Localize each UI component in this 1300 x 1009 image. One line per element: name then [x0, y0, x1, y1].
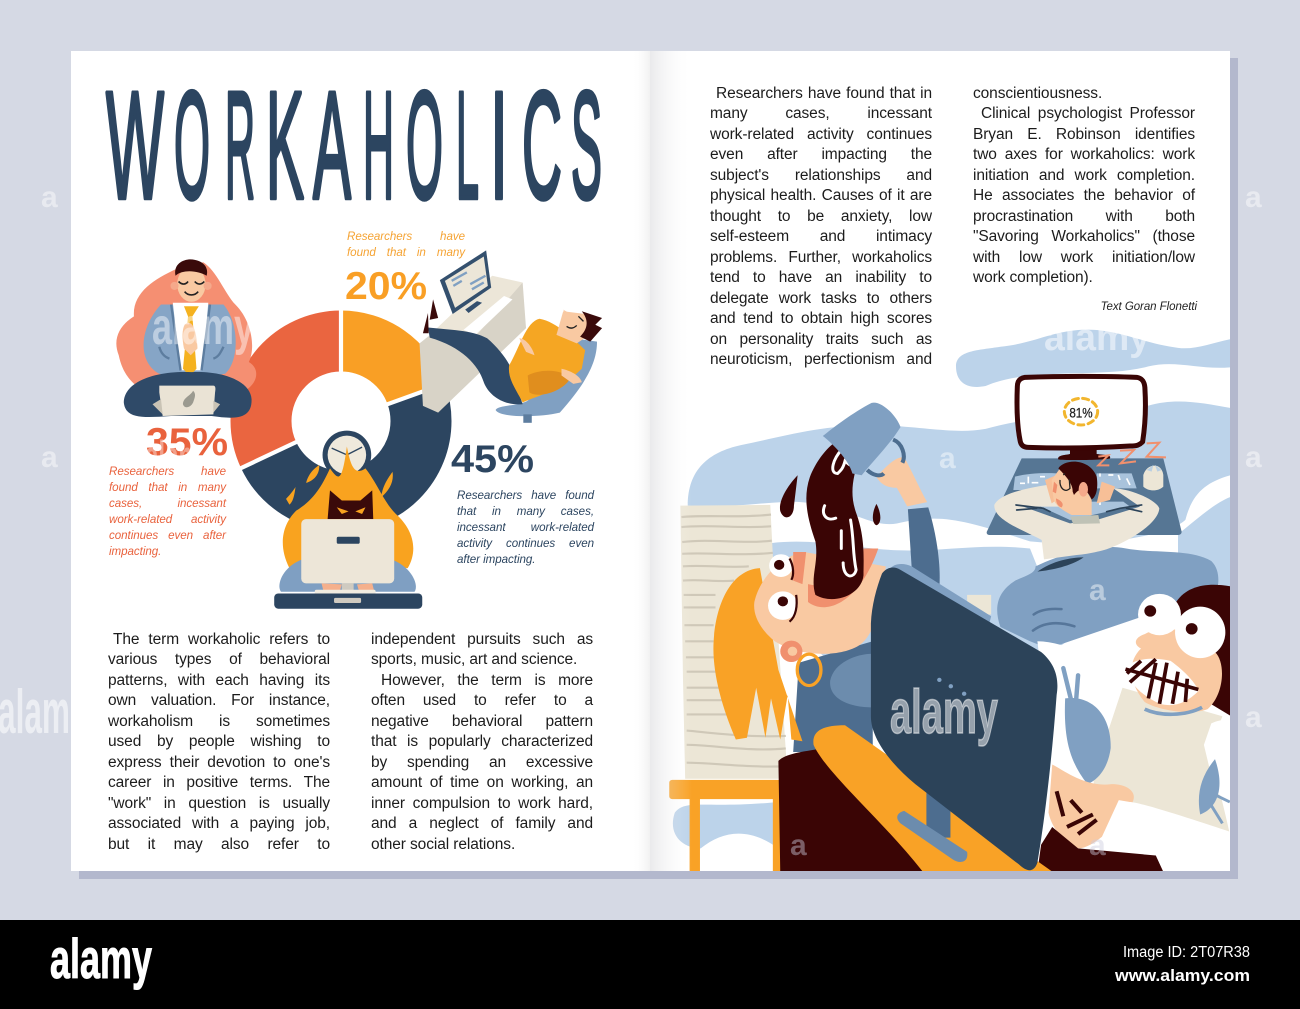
watermarks: a: [41, 181, 58, 214]
text column: left page two: that is popularly characterized: [371, 733, 593, 750]
title: A: [313, 60, 351, 231]
text column: right page one: Researchers have found that in: [716, 85, 932, 102]
caption: 35 percent: continues even after: [109, 529, 226, 542]
text column: right page one: many cases, incessant: [710, 105, 932, 122]
text column: right page one: physical health. Causes of it are: [710, 187, 932, 204]
blue chair back: [997, 547, 1218, 648]
watermarks: a: [768, 182, 785, 215]
watermarks: a: [1089, 574, 1106, 607]
text column: right page one: subject's relationships and: [710, 167, 932, 184]
text column: left page two: by spending an excessive: [371, 754, 593, 771]
text column: right page one: tend to have an inability to: [710, 269, 932, 286]
mouse: [1143, 465, 1163, 490]
magazine spread artwork: S: [571, 60, 602, 231]
caption: 45 percent: after impacting.: [457, 553, 535, 566]
text column: right page one: thought to be anxiety, low: [710, 208, 932, 225]
text column: left page two: sports, music, art and science.: [371, 651, 577, 668]
watermarks: alam: [145, 432, 200, 479]
text column: left page one: own valuation. For instance,: [108, 692, 330, 709]
page gutter shading: [632, 51, 692, 871]
watermarks: alamy: [890, 678, 998, 747]
title: C: [522, 60, 562, 231]
text column: right page one: [710, 85, 932, 368]
watermarks: a: [41, 441, 58, 474]
paper stack: [680, 505, 991, 779]
text column: left page one: patterns, with each having its: [108, 672, 330, 689]
monitor with 81%: 81%: [1069, 404, 1093, 420]
text column: right page two: Clinical psychologist Professor: [981, 105, 1195, 122]
caption: 35 percent: cases, incessant: [109, 497, 226, 510]
text column: right page two: He associates the behavior of: [973, 187, 1195, 204]
coffee stream: [806, 442, 864, 599]
watermarks: alamy: [1044, 317, 1150, 359]
caption: 45 percent: activity continues even: [457, 537, 594, 550]
title: K: [266, 60, 304, 231]
text column: left page one: The term workaholic refers to: [113, 631, 330, 648]
illustration: burnout worker in flames: [274, 431, 422, 609]
text column: left page two: other social relations.: [371, 836, 515, 853]
watermarks: a: [1245, 181, 1262, 214]
caption: 35 percent: work-related activity: [109, 513, 226, 526]
watermarks: alam: [0, 678, 70, 747]
text column: left page two: However, the term is more: [381, 672, 593, 689]
caption: 35 percent: Researchers have: [109, 465, 226, 478]
coffee-drinking woman: [713, 403, 1057, 872]
text column: left page one: workaholism is sometimes: [108, 713, 330, 730]
panicked man: [1037, 585, 1237, 877]
right page illustration: [669, 330, 1237, 877]
text column: right page two: "Savoring Workaholics" (those: [973, 228, 1195, 245]
text column: right page two: two axes for workaholics: work: [973, 146, 1195, 163]
illustration: reclining man: [420, 250, 602, 423]
watermarks: a: [1089, 829, 1106, 862]
caption: 35 percent: [109, 465, 227, 558]
caption: 45 percent: incessant work-related: [457, 521, 594, 534]
monitor with 81%: [1017, 376, 1145, 460]
text column: right page two: with low work initiation/low: [973, 249, 1195, 266]
watermarks: alamy: [152, 298, 254, 356]
title: I: [490, 60, 508, 231]
text column: left page two: amount of time on working, an: [371, 774, 593, 791]
title: L: [456, 60, 479, 231]
text column: right page one: even after impacting the: [710, 146, 932, 163]
watermarks: a: [790, 829, 807, 862]
text column: right page one: delegate work tasks to others: [710, 290, 932, 307]
text column: left page one: express their devotion to one's: [108, 754, 330, 771]
text column: left page one: career in positive terms. The: [108, 774, 330, 791]
watermarks: a: [939, 442, 956, 475]
text column: left page one: [108, 631, 330, 853]
text column: right page one: self-esteem and intimacy: [710, 228, 932, 245]
alamy logo: alamy: [50, 927, 152, 990]
text column: right page two: initiation and work completion.: [973, 167, 1195, 184]
title: H: [363, 60, 394, 231]
text column: right page one: problems. Further, workaholics: [710, 249, 932, 266]
text column: right page one: work-related activity continues: [710, 126, 932, 143]
caption: 35 percent: found that in many: [109, 481, 226, 494]
text column: left page one: associated with a paying job,: [108, 815, 330, 832]
watermarks: [0, 181, 1262, 862]
donut chart: [237, 305, 449, 501]
35 percent figure: 35%: [146, 421, 228, 464]
text credit: Text Goran Flonetti: [1101, 301, 1197, 313]
caption: 20 percent: found that in many: [347, 246, 465, 259]
sleeping man at computer: [987, 376, 1182, 559]
website: www.alamy.com: [1114, 966, 1250, 985]
table: [669, 780, 784, 873]
text column: left page two: and a neglect of family and: [371, 815, 593, 832]
text column: left page two: independent pursuits such as: [371, 631, 593, 648]
title: O: [174, 60, 210, 231]
illustration: meditating man: [116, 259, 256, 418]
text column: right page two: conscientiousness.: [973, 85, 1102, 102]
watermarks: a: [1245, 441, 1262, 474]
mug: [823, 403, 900, 475]
caption: 45 percent: that in many cases,: [457, 505, 594, 518]
text column: right page one: and tend to obtain high scores: [710, 310, 932, 327]
background waves: [673, 330, 1237, 848]
caption: 45 percent: Researchers have found: [457, 489, 594, 502]
text column: right page one: on personality traits such as: [710, 331, 932, 348]
title: W: [106, 60, 164, 231]
caption: 45 percent: [457, 489, 594, 566]
text column: left page one: but it may also refer to: [108, 836, 330, 853]
watermarks: a: [1245, 701, 1262, 734]
text column: left page one: used by people wishing to: [108, 733, 330, 750]
caption: 20 percent: [347, 230, 466, 259]
text column: right page two: procrastination with both: [973, 208, 1195, 225]
text column: left page two: often used to refer to a: [371, 692, 593, 709]
title: R: [225, 60, 255, 231]
image id: Image ID: 2T07R38: [1123, 944, 1250, 961]
text column: right page two: [973, 85, 1196, 286]
20 percent figure: 20%: [345, 265, 427, 308]
computer back: [926, 792, 950, 838]
caption: 20 percent: Researchers have: [347, 230, 465, 243]
text column: right page one: neuroticism, perfectionism and: [710, 351, 932, 368]
text column: left page two: [371, 631, 594, 853]
caption: 35 percent: impacting.: [109, 545, 161, 558]
text column: left page one: various types of behavioral: [108, 651, 330, 668]
text column: left page two: inner compulsion to work hard,: [371, 795, 593, 812]
text column: left page one: "work" in question is usually: [108, 795, 330, 812]
title: O: [406, 60, 443, 231]
text column: left page two: negative behavioral pattern: [371, 713, 593, 730]
text column: right page two: work completion).: [973, 269, 1093, 286]
45 percent figure: 45%: [451, 438, 534, 481]
footer bar: [0, 920, 1300, 1009]
text column: right page two: Bryan E. Robinson identifies: [973, 126, 1195, 143]
